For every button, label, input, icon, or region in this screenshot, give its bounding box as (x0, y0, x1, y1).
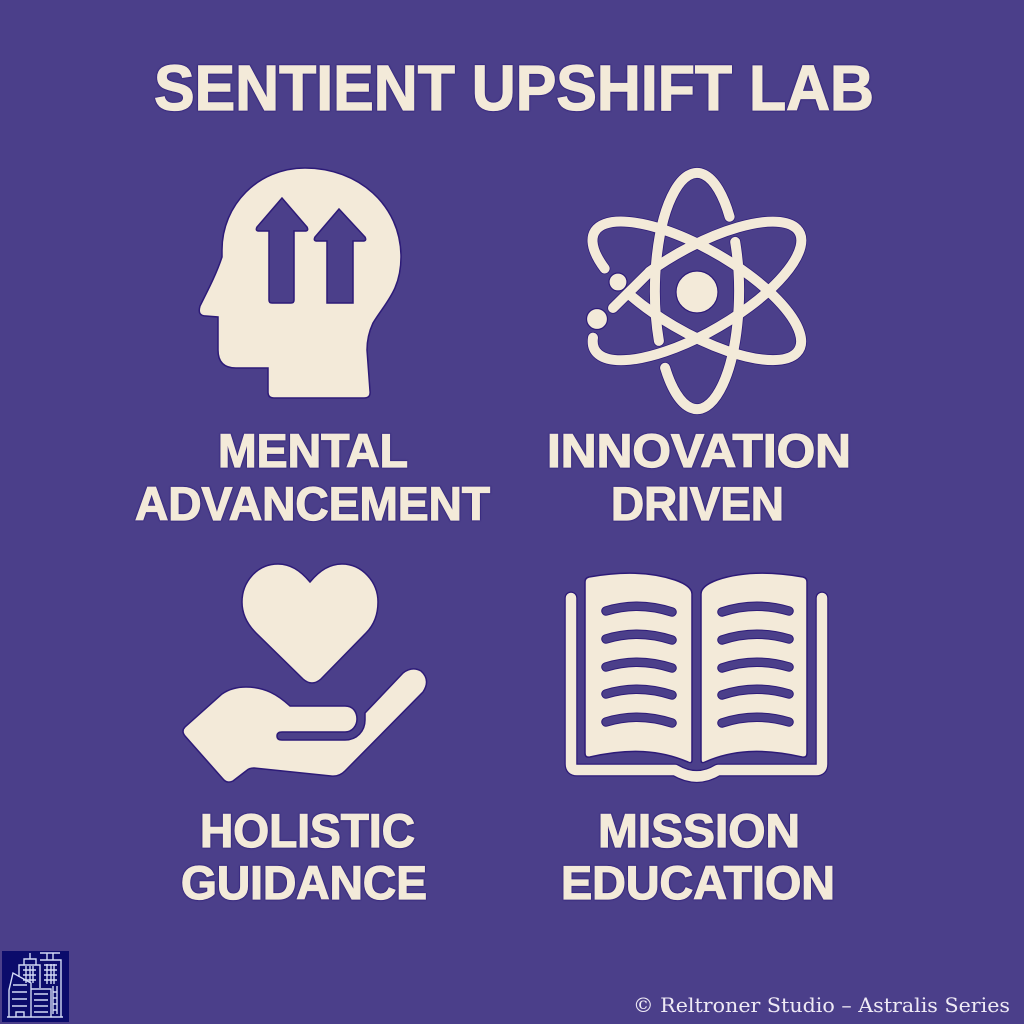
label: innovation driven: DRIVEN (611, 477, 784, 530)
left page (585, 573, 692, 763)
right page (701, 573, 807, 763)
icon: city skyline logo (2, 951, 69, 1022)
book cover (571, 598, 822, 776)
icon: open book (571, 573, 822, 776)
label: holistic guidance: HOLISTIC (200, 804, 415, 857)
label: mission education (561, 804, 835, 909)
icon: open hand (183, 669, 427, 782)
label: mental advancement: ADVANCEMENT (135, 477, 490, 530)
footer credit: © Reltroner Studio – Astralis Series (633, 993, 1010, 1017)
label: mental advancement: MENTAL (218, 424, 408, 477)
icon: head with two up arrows (199, 168, 401, 398)
label: holistic guidance: GUIDANCE (181, 856, 427, 909)
label: innovation driven: INNOVATION (547, 424, 851, 477)
label: innovation driven (547, 424, 851, 530)
icon: heart (242, 564, 378, 683)
panel: mental advancement (135, 168, 490, 530)
label: mission education: MISSION (598, 804, 800, 857)
label: holistic guidance (181, 804, 427, 909)
panel: innovation driven (547, 173, 851, 530)
label: mental advancement (135, 424, 490, 530)
panel: holistic guidance (181, 564, 427, 909)
page lines (606, 606, 789, 723)
label: mission education: EDUCATION (561, 856, 835, 909)
panel: mission education (561, 573, 835, 909)
icon: atom (574, 173, 820, 409)
title: SENTIENT UPSHIFT LAB (154, 52, 874, 124)
